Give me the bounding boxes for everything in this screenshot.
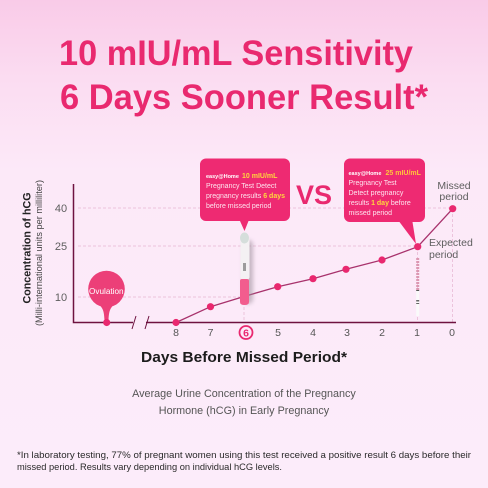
expected period label: period (429, 249, 458, 261)
caption: Hormone (hCG) in Early Pregnancy (159, 405, 330, 417)
callout: 10 mIU/mL: before missed period (206, 203, 271, 210)
callout: 25 mIU/mL (344, 158, 425, 244)
data points (172, 205, 456, 326)
axes (74, 184, 456, 322)
caption: Average Urine Concentration of the Pregnancy (132, 388, 356, 400)
expected period label: Expected (429, 237, 473, 249)
axis break (132, 316, 149, 329)
y axis tick labels: 10 (55, 292, 67, 304)
y axis title: (Milli-international units per milliliter) (34, 180, 44, 326)
x axis tick labels: 4 (310, 327, 316, 339)
y axis tick labels: 25 (55, 241, 67, 253)
x axis tick labels (173, 327, 455, 339)
callout: 10 mIU/mL: 10 mIU/mL (242, 173, 278, 180)
callout: 25 mIU/mL: results 1 day before (348, 200, 411, 207)
callout: 10 mIU/mL (200, 158, 290, 231)
y axis title (22, 180, 44, 326)
x axis tick labels: 3 (344, 327, 350, 339)
y axis tick labels (55, 203, 67, 304)
callout: 25 mIU/mL: Pregnancy Test (348, 180, 397, 187)
highlighted tick 6 (240, 326, 252, 340)
title: 6 Days Sooner Result* (60, 78, 428, 117)
missed period label (437, 180, 471, 203)
ovulation marker: Ovulation (89, 287, 124, 296)
title (59, 34, 428, 117)
expected period label (429, 237, 473, 261)
highlighted tick 6: 6 (243, 328, 249, 340)
caption (132, 388, 356, 417)
footnote: *In laboratory testing, 77% of pregnant women using this test received a positive result 6 days before their (17, 450, 471, 460)
icon: test strip (416, 258, 419, 316)
callout: 25 mIU/mL: missed period (348, 210, 392, 217)
x axis title: Days Before Missed Period* (141, 349, 347, 366)
missed period label: Missed (437, 180, 471, 192)
x axis tick labels: 2 (379, 327, 385, 339)
x axis tick labels: 8 (173, 327, 179, 339)
title: 10 mIU/mL Sensitivity (59, 34, 414, 73)
x axis tick labels: 5 (275, 327, 281, 339)
callout: 25 mIU/mL: easy@Home (348, 171, 381, 177)
data line (176, 209, 453, 322)
missed period label: period (439, 191, 469, 203)
y axis title: Concentration of hCG (22, 192, 34, 304)
x axis tick labels: 0 (449, 327, 455, 339)
footnote (17, 450, 471, 472)
callout: 10 mIU/mL: Pregnancy Test Detect (206, 183, 276, 190)
callout: 10 mIU/mL: pregnancy results 6 days (206, 193, 285, 200)
chart: hCG concentration line chart (22, 180, 473, 366)
callout: 25 mIU/mL: Detect pregnancy (348, 190, 404, 197)
callout: 10 mIU/mL: easy@Home (206, 174, 239, 180)
x axis tick labels: 1 (414, 327, 420, 339)
footnote: missed period. Results vary depending on individual hCG levels. (17, 462, 282, 472)
callout: 25 mIU/mL: 25 mIU/mL (386, 170, 422, 177)
icon: midstream test stick (240, 232, 253, 305)
y axis tick labels: 40 (55, 203, 67, 215)
ovulation marker (88, 271, 125, 326)
VS label: VS (296, 180, 332, 210)
x axis tick labels: 7 (208, 327, 214, 339)
